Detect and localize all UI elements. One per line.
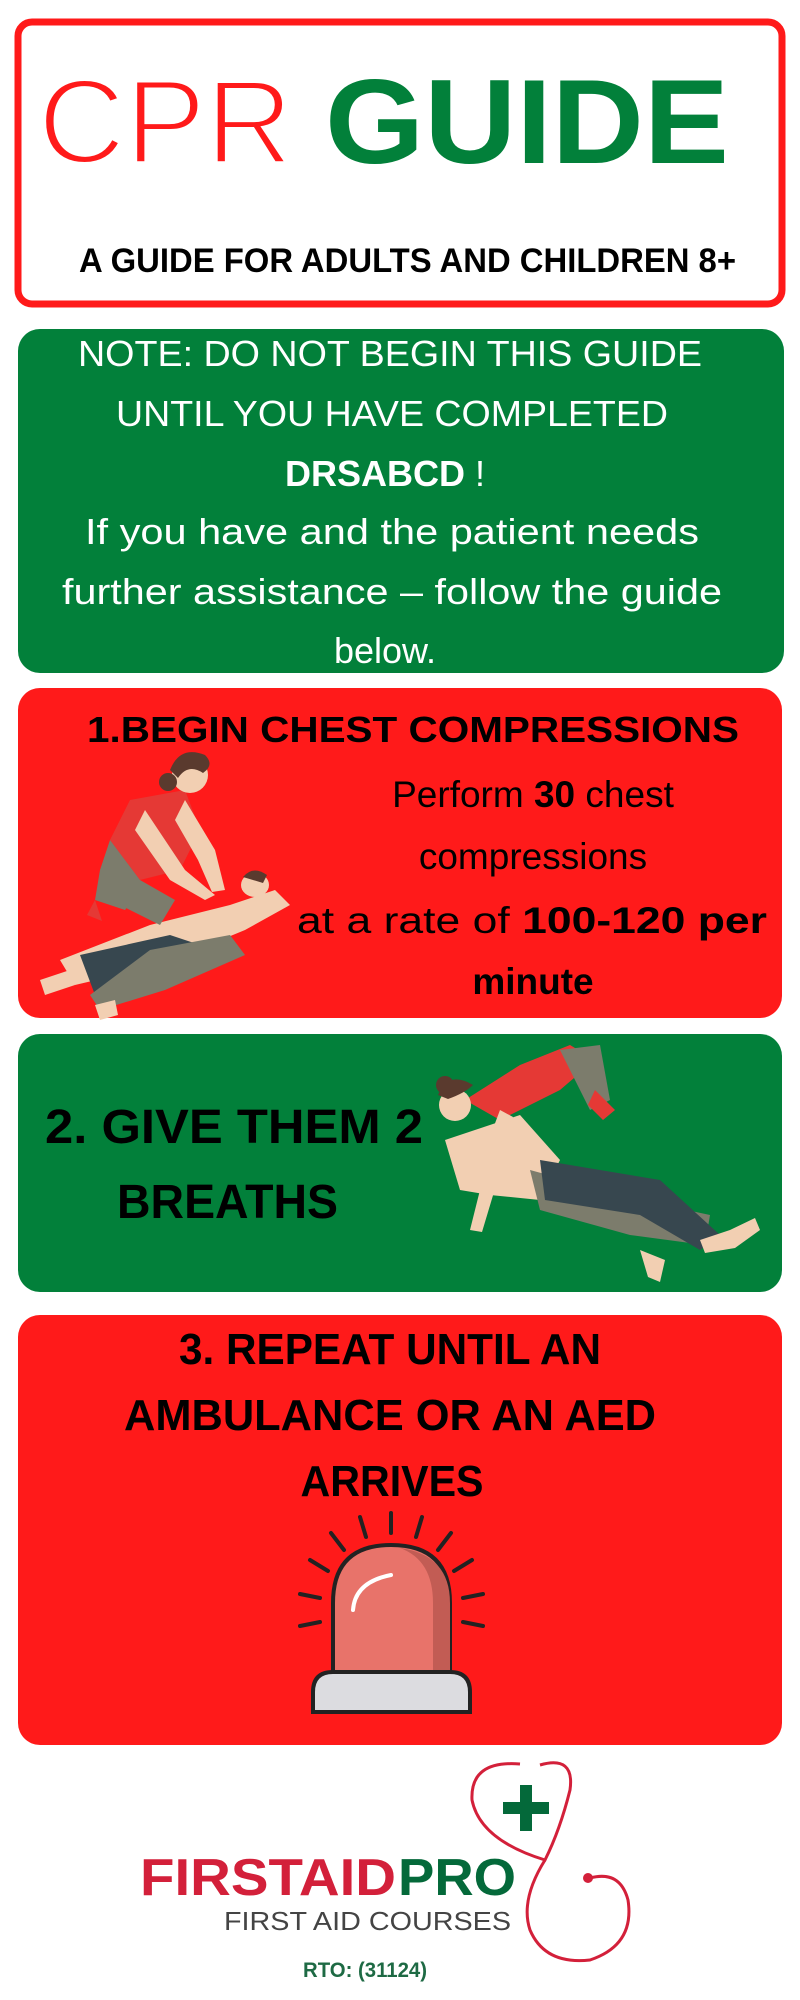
logo: FirstAidPro (140, 1763, 629, 1982)
illustration: rescuer doing compressions (40, 752, 290, 1020)
logo: FirstAidPro: FIRST AID COURSES (224, 1906, 511, 1936)
panel: step 3 repeat (18, 1315, 782, 1745)
title: CPR GUIDE: GUIDE (325, 55, 729, 189)
step 1 body text (297, 774, 767, 1002)
logo: FirstAidPro: FIRSTAID (140, 1849, 396, 1907)
panel: step 2 breaths (18, 1034, 782, 1292)
title: CPR GUIDE: CPR (38, 55, 293, 189)
step 3 heading: ARRIVES (300, 1457, 484, 1506)
step 1 body text: Perform 30 chest (392, 774, 675, 815)
step 2 heading (45, 1101, 423, 1229)
subtitle: A GUIDE FOR ADULTS AND CHILDREN 8+ (79, 242, 736, 280)
step 3 heading: 3. REPEAT UNTIL AN (179, 1325, 601, 1374)
note text (62, 333, 722, 671)
step 3 heading: AMBULANCE OR AN AED (124, 1391, 656, 1440)
note text: If you have and the patient needs (85, 511, 699, 552)
step 2 heading: 2. GIVE THEM 2 (45, 1101, 423, 1154)
step 1 body text: minute (472, 961, 594, 1002)
step 1 body text: at a rate of 100-120 per (297, 900, 767, 941)
icon: green plus (503, 1785, 549, 1831)
icon: stethoscope heart (472, 1763, 629, 1961)
note text: further assistance – follow the guide (62, 571, 722, 612)
panel: note (18, 329, 784, 673)
header panel (18, 22, 782, 304)
step 2 heading: BREATHS (117, 1176, 338, 1229)
logo: FirstAidPro: PRO (398, 1849, 516, 1907)
note text: below. (334, 630, 436, 671)
step 1 heading: 1.BEGIN CHEST COMPRESSIONS (87, 709, 739, 750)
panel: step 1 chest compressions (18, 688, 782, 1020)
step 3 heading (124, 1325, 656, 1506)
step 1 body text: compressions (419, 836, 647, 877)
logo: FirstAidPro: RTO: (31124) (303, 1959, 427, 1982)
note text: UNTIL YOU HAVE COMPLETED (116, 393, 668, 434)
illustration: rescuer giving breaths (436, 1045, 760, 1282)
icon: siren (300, 1513, 483, 1712)
title: CPR GUIDE (38, 55, 729, 189)
note text: DRSABCD ! (285, 453, 485, 494)
note text: NOTE: DO NOT BEGIN THIS GUIDE (78, 333, 702, 374)
